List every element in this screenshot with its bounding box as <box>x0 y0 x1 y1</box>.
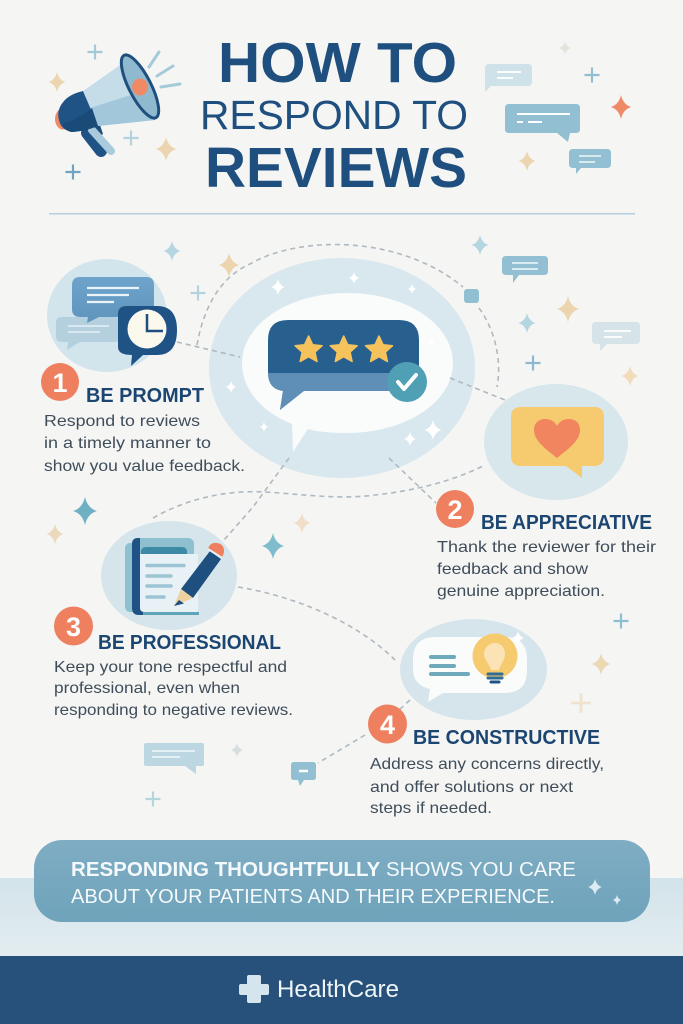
badge 1 <box>41 363 79 401</box>
body text: Respond to reviews <box>44 413 200 430</box>
title: HOW TO <box>218 31 457 95</box>
panel: step 1 be prompt <box>41 259 245 475</box>
body text: show you value feedback. <box>44 458 245 475</box>
body text <box>437 539 657 600</box>
heading: BE APPRECIATIVE <box>481 512 652 534</box>
callout text: RESPONDING THOUGHTFULLY SHOWS YOU CARE <box>71 859 576 881</box>
badge 3 <box>54 606 93 646</box>
title <box>200 31 468 200</box>
dashed connectors <box>153 245 510 763</box>
body text: feedback and show <box>437 561 588 578</box>
check badge <box>387 362 427 402</box>
white speech bubble <box>242 293 453 452</box>
heading: BE PROMPT <box>86 385 204 407</box>
header decorations <box>48 41 631 180</box>
body text <box>54 659 293 719</box>
body text: and offer solutions or next <box>370 779 574 796</box>
bottom light band <box>0 878 683 956</box>
sparkles on halo <box>226 272 442 446</box>
badge 3: 3 <box>66 612 81 642</box>
body text <box>44 413 245 475</box>
body text: Keep your tone respectful and <box>54 659 287 676</box>
divider line <box>49 213 635 214</box>
icon: medical cross <box>239 975 269 1003</box>
panel: step 4 be constructive <box>368 619 604 817</box>
heading: BE CONSTRUCTIVE <box>413 727 600 749</box>
panel: central review bubble <box>209 258 475 478</box>
badge 4 <box>368 704 407 744</box>
body text: Thank the reviewer for their <box>437 539 657 556</box>
panel: step 3 be professional <box>54 521 293 719</box>
badge 4: 4 <box>380 710 395 740</box>
heading: BE PROFESSIONAL <box>98 632 281 654</box>
body text: in a timely manner to <box>44 435 211 452</box>
body text <box>370 756 604 817</box>
review bubble with stars <box>268 320 419 410</box>
title: REVIEWS <box>205 136 467 200</box>
body text: professional, even when <box>54 680 240 697</box>
body text: responding to negative reviews. <box>54 702 293 719</box>
icon: notepad and pencil <box>101 521 237 630</box>
title: RESPOND TO <box>200 92 468 138</box>
callout text: ABOUT YOUR PATIENTS AND THEIR EXPERIENCE. <box>71 886 555 908</box>
panel: step 2 be appreciative <box>436 384 657 600</box>
logo text: HealthCare <box>277 976 399 1003</box>
body text: Address any concerns directly, <box>370 756 604 773</box>
callout panel <box>34 840 650 922</box>
icon: header speech bubbles <box>485 64 611 174</box>
sparkles <box>588 879 621 905</box>
icon: chat bubbles and clock <box>47 259 177 372</box>
callout text <box>71 859 576 908</box>
middle decorations <box>46 235 638 806</box>
icon: decorative bubbles and square <box>144 256 640 786</box>
icon: lightbulb bubble <box>400 619 547 720</box>
badge 2 <box>436 490 474 528</box>
footer bar <box>0 956 683 1024</box>
body text: steps if needed. <box>370 800 492 817</box>
badge 1: 1 <box>52 368 68 398</box>
icon: heart bubble <box>484 384 628 500</box>
body text: genuine appreciation. <box>437 583 605 600</box>
badge 2: 2 <box>447 495 463 525</box>
central halo <box>209 258 475 478</box>
icon: megaphone <box>55 50 180 151</box>
